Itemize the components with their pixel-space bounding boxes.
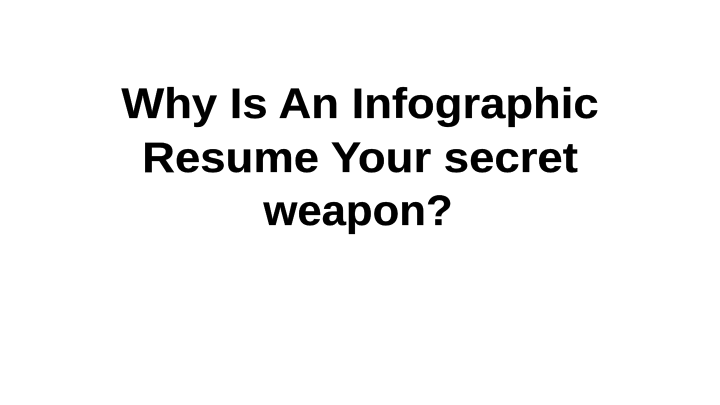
title: weapon? [263, 187, 453, 235]
title: Resume Your secret [142, 134, 578, 182]
title: Why Is An Infographic [121, 80, 599, 128]
title [121, 80, 599, 235]
